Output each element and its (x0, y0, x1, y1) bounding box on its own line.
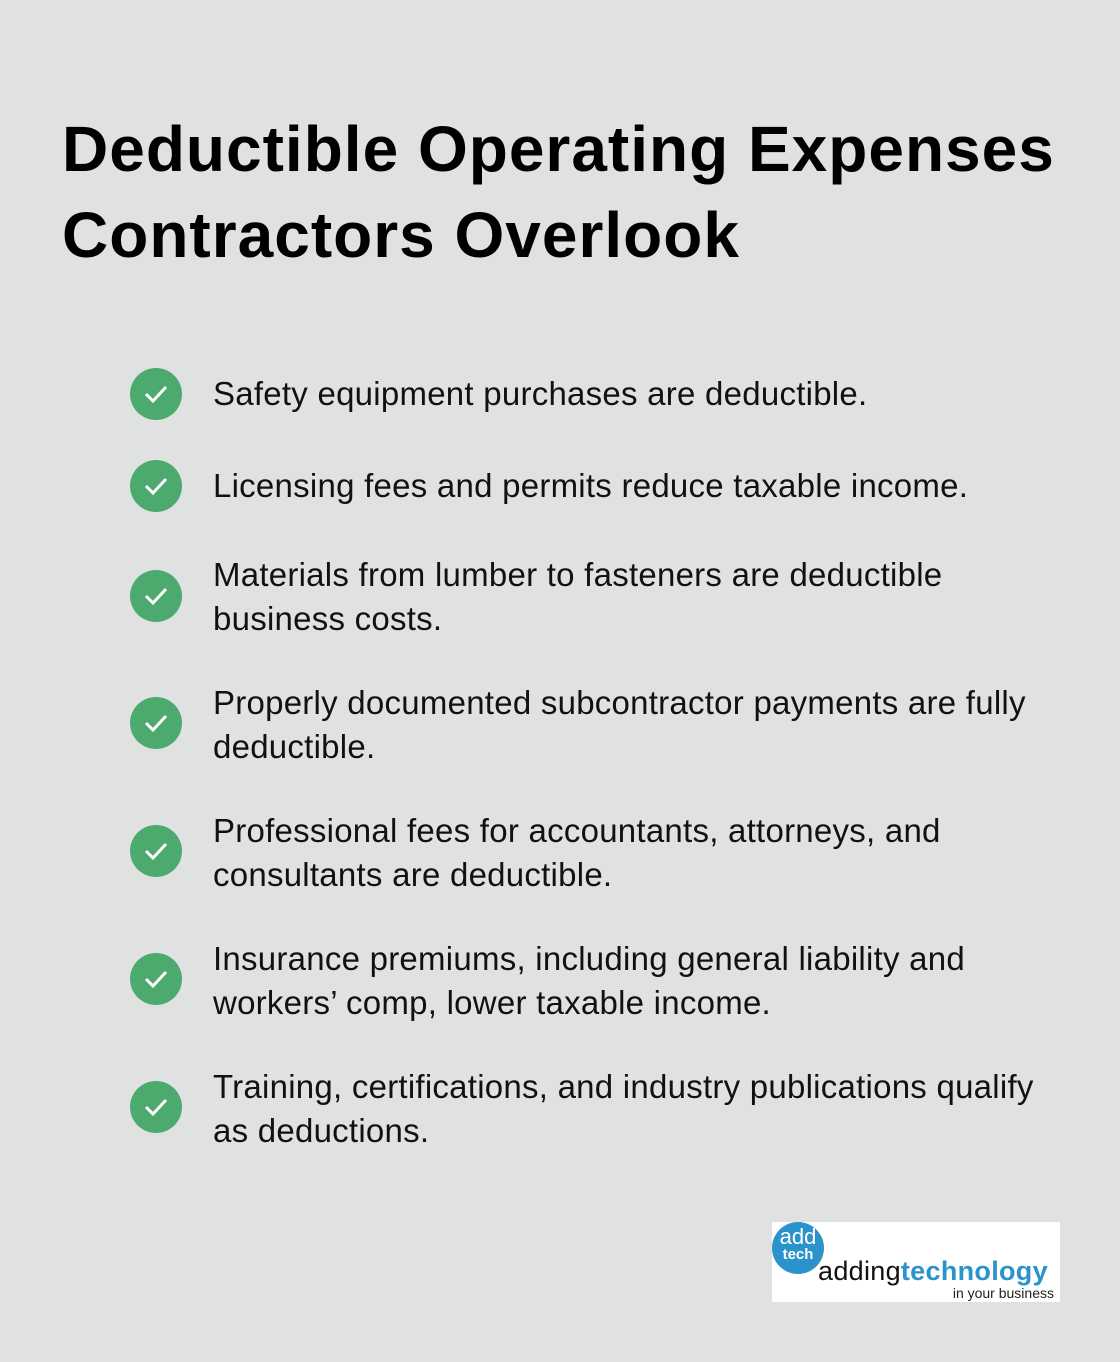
item 4 (130, 684, 1026, 765)
text: as deductions. (213, 1112, 429, 1149)
text: Licensing fees and permits reduce taxable income. (213, 467, 968, 504)
text: business costs. (213, 600, 442, 637)
text (213, 684, 1026, 765)
title: Contractors Overlook (62, 199, 740, 271)
logo (772, 1222, 1060, 1302)
logo wordmark: addingtechnology (818, 1256, 1048, 1286)
text: Insurance premiums, including general liability and (213, 940, 965, 977)
item 6 (130, 940, 965, 1021)
logo circle: tech (783, 1246, 813, 1263)
title: Deductible Operating Expenses (62, 113, 1055, 185)
item 3 (130, 556, 942, 637)
text: Safety equipment purchases are deductible. (213, 375, 867, 412)
text: Properly documented subcontractor payments are fully (213, 684, 1026, 721)
text: Professional fees for accountants, attorneys, and (213, 812, 941, 849)
text: workers’ comp, lower taxable income. (213, 984, 771, 1021)
tagline: in your business (953, 1285, 1054, 1301)
text (213, 1068, 1034, 1149)
text: deductible. (213, 728, 375, 765)
text: Training, certifications, and industry publications qualify (213, 1068, 1034, 1105)
item 5 (130, 812, 941, 893)
icon: check (130, 570, 182, 622)
text: Materials from lumber to fasteners are deductible (213, 556, 942, 593)
text (213, 812, 941, 893)
icon: check (130, 368, 182, 420)
icon: check (130, 825, 182, 877)
logo circle: add (780, 1224, 816, 1249)
item 2 (130, 460, 968, 512)
item 1 (130, 368, 867, 420)
icon: check (130, 697, 182, 749)
text (213, 940, 965, 1021)
item 7 (130, 1068, 1034, 1149)
icon: check (130, 1081, 182, 1133)
logo circle (772, 1222, 824, 1274)
title (62, 113, 1055, 271)
text (213, 556, 942, 637)
icon: check (130, 460, 182, 512)
text: consultants are deductible. (213, 856, 612, 893)
icon: check (130, 953, 182, 1005)
